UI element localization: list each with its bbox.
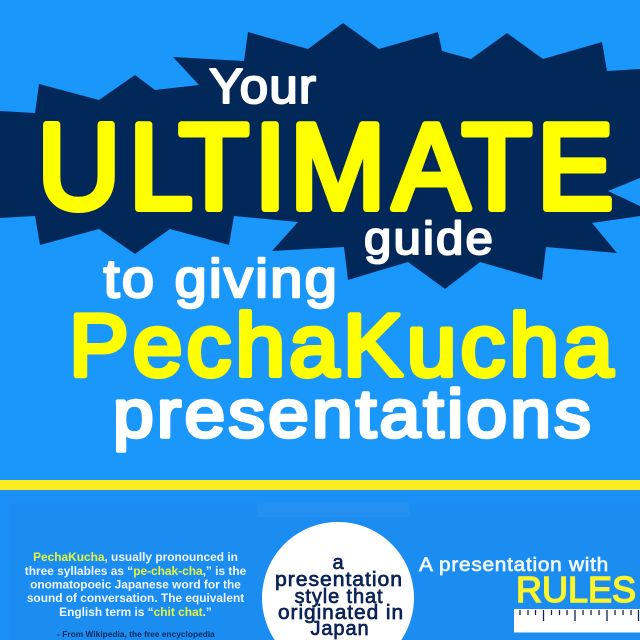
text block: PechaKucha definition: onomatopoeic Japanese word for the bbox=[30, 578, 241, 592]
white circle callout: originated in bbox=[278, 602, 404, 624]
white circle callout: a bbox=[332, 552, 345, 574]
text block: PechaKucha definition: English term is “chit chat.” bbox=[59, 605, 212, 619]
white circle callout: Japan bbox=[310, 618, 370, 640]
yellow divider band bbox=[0, 480, 640, 490]
white circle callout bbox=[262, 522, 414, 640]
text: A presentation with: A presentation with bbox=[419, 554, 609, 576]
white circle callout: presentation bbox=[275, 569, 403, 591]
title: PechaKucha: PechaKucha bbox=[69, 296, 617, 394]
text block: PechaKucha definition: sound of conversation. The equivalent bbox=[27, 591, 244, 605]
heading: RULES: RULES bbox=[516, 569, 636, 610]
text block: PechaKucha definition: PechaKucha, usually pronounced in bbox=[33, 550, 238, 564]
source credit: - From Wikipedia, the free encyclopedia bbox=[57, 629, 215, 639]
starburst background bbox=[0, 23, 640, 289]
text block: PechaKucha definition bbox=[25, 550, 247, 619]
title: to giving: to giving bbox=[104, 249, 339, 309]
white circle callout: style that bbox=[294, 586, 384, 608]
text block: PechaKucha definition: three syllables as “pe-chak-cha,” is the bbox=[25, 564, 247, 578]
lower panel bbox=[0, 490, 640, 640]
title: Your: Your bbox=[209, 60, 317, 114]
title: presentations: presentations bbox=[113, 376, 594, 452]
ruler icon bbox=[514, 609, 640, 632]
title: ULTIMATE: ULTIMATE bbox=[38, 99, 614, 235]
title: guide: guide bbox=[364, 212, 495, 264]
